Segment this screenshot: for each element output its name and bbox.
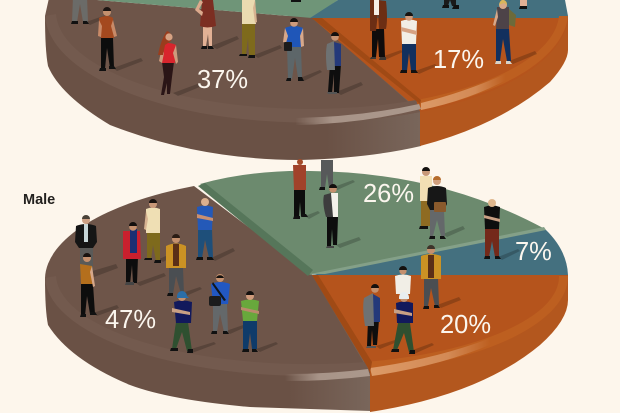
person: grey coat, navy shirt xyxy=(363,284,397,349)
person: grey top, navy jeans, backpack xyxy=(493,0,537,64)
side wall: orange xyxy=(370,275,568,412)
side wall: orange xyxy=(420,16,568,146)
person: grey jacket, black trousers xyxy=(326,32,363,95)
person: grey trousers cropped xyxy=(71,0,108,25)
person: brown dress xyxy=(195,0,239,49)
slice edge: green and blue xyxy=(310,227,546,274)
person: navy shirt, cap, green trousers xyxy=(170,291,216,353)
slice: orange 17% xyxy=(312,18,568,112)
person: orange shirt, black trousers xyxy=(98,7,143,71)
rim highlight: brown xyxy=(285,369,370,381)
person: red vest xyxy=(123,222,166,286)
label: 37%: 37% xyxy=(197,66,248,94)
pie chart: top xyxy=(45,0,568,160)
rim highlight: orange xyxy=(421,74,510,110)
rim highlight: orange xyxy=(370,339,492,376)
person: feet at blue slice right xyxy=(519,0,527,9)
slice: green 26% xyxy=(200,171,545,275)
person: feet at green slice xyxy=(291,0,301,2)
bevel: brown xyxy=(45,14,420,122)
person: cream top, olive trousers xyxy=(239,0,282,58)
person: red top, long hair xyxy=(158,31,202,96)
person: grey trousers xyxy=(319,160,355,191)
slice: green xyxy=(97,0,338,18)
slice: blue xyxy=(310,0,568,18)
person: black shirt, red trousers xyxy=(484,199,520,260)
person: blue shirt, bag xyxy=(283,18,322,81)
slice edge: green xyxy=(198,183,313,276)
slice: orange 20% xyxy=(312,275,568,373)
person: brown coat, white shirt xyxy=(370,0,403,60)
label: 26%: 26% xyxy=(363,180,414,208)
pie chart: bottom xyxy=(45,159,568,412)
heading: Male: Male xyxy=(23,192,55,208)
bevel: orange xyxy=(366,276,568,373)
label: 20%: 20% xyxy=(440,311,491,339)
person: blue shirt, messenger bag xyxy=(209,274,248,334)
slice edge: orange xyxy=(312,275,372,373)
person: white shirt, navy trousers xyxy=(400,12,437,74)
person: yellow jacket, right xyxy=(421,245,461,309)
person: green shirt, navy trousers xyxy=(241,291,278,352)
bevel: orange xyxy=(417,16,568,110)
slice edge xyxy=(312,18,421,104)
label: 7%: 7% xyxy=(515,238,552,266)
slice: blue 7% xyxy=(312,229,568,275)
person: black jacket, satchel xyxy=(427,176,465,239)
person: cream top, olive trousers, behind xyxy=(419,167,432,229)
slice: brown 47% xyxy=(45,186,370,376)
person: red shirt, black trousers xyxy=(293,159,320,219)
person: black suit xyxy=(75,215,118,277)
person: cream top, olive trousers xyxy=(144,199,175,263)
slice: brown 37% xyxy=(45,0,420,122)
person: navy shirt, cap, green trousers right xyxy=(391,292,434,354)
label: 17%: 17% xyxy=(433,46,484,74)
rim highlight: brown xyxy=(296,104,421,125)
person: yellow jacket xyxy=(166,234,202,296)
label: 47%: 47% xyxy=(105,306,156,334)
person: ochre vest, black trousers xyxy=(80,253,119,317)
side wall: brown xyxy=(45,275,371,411)
person: blue shirt, arms crossed xyxy=(196,198,235,261)
person: dark coat, white shirt xyxy=(323,184,361,248)
person: feet at blue slice xyxy=(442,0,459,9)
person: white shirt, behind xyxy=(395,266,411,294)
side wall: brown xyxy=(45,16,421,160)
bevel: brown xyxy=(45,276,370,376)
